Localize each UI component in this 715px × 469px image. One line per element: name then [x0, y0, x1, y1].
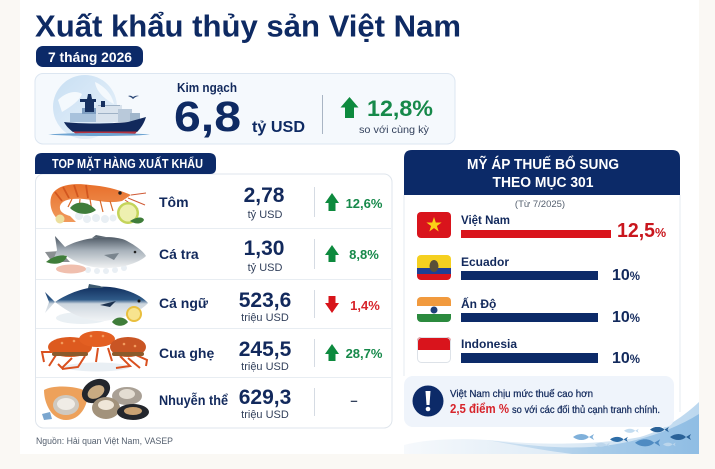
unit: tỷ USD: [248, 262, 282, 274]
value: 10%: [612, 350, 640, 367]
value: 2,78: [244, 184, 285, 207]
heading: top products: [35, 153, 216, 174]
value: 10%: [612, 309, 640, 326]
change: no data dash: –: [350, 393, 358, 408]
change: 8,8%: [349, 247, 379, 262]
value: 10%: [612, 267, 640, 284]
flag: Vietnam: [417, 212, 451, 238]
unit: tỷ USD: [252, 119, 305, 136]
icon: pangasius fish: [45, 235, 146, 274]
row: Nhuyễn thể: [42, 374, 358, 421]
country label: Indonesia: [461, 337, 517, 351]
value: 12,5: [617, 219, 655, 242]
row: Cá tra: [45, 235, 379, 274]
flag: Ecuador: [417, 255, 451, 280]
unit: triệu USD: [241, 409, 289, 421]
source note: Nguồn: Hải quan Việt Nam, VASEP: [36, 436, 173, 447]
value: 245,5: [239, 338, 292, 361]
icon: container ship with globe: [48, 75, 150, 139]
flag: India: [417, 297, 451, 322]
unit: triệu USD: [241, 312, 289, 324]
heading: top products: TOP MẶT HÀNG XUẤT KHẨU: [52, 156, 203, 171]
product name: Nhuyễn thể: [159, 392, 228, 408]
label: Kim ngạch: Kim ngạch: [177, 81, 237, 95]
icon: up arrow: [325, 344, 339, 361]
value: 6,8: 6,8: [174, 93, 241, 141]
period badge: [36, 46, 143, 67]
callout text: so với các đối thủ cạnh tranh chính.: [512, 404, 660, 416]
percent sign: %: [655, 226, 666, 240]
title: Xuất khẩu thủy sản Việt Nam: [35, 8, 461, 44]
callout text: 2,5 điểm %: [450, 401, 509, 416]
icon: tuna: [45, 284, 148, 326]
period badge: 7 tháng 2026: [48, 49, 132, 65]
icon: down arrow: [325, 296, 339, 313]
country label: Ecuador: [461, 255, 509, 269]
row: Ecuador: [417, 255, 640, 280]
icon: exclamation mark: [412, 386, 444, 416]
change: 12,6%: [346, 196, 383, 211]
panel heading: MỸ ÁP THUẾ BỔ SUNG: [467, 155, 619, 173]
callout: [404, 376, 674, 427]
product name: Cá ngữ: [159, 295, 209, 311]
date note: (Từ 7/2025): [515, 199, 565, 210]
panel: export turnover summary: [35, 74, 455, 144]
change: 28,7%: [346, 346, 383, 361]
row: Tôm: [50, 184, 383, 224]
row: Cá ngữ: [45, 284, 380, 326]
icon: up arrow: [340, 97, 358, 118]
value: 629,3: [239, 386, 291, 409]
icon: shellfish: [42, 374, 149, 420]
bar: [461, 230, 611, 238]
product name: Cá tra: [159, 246, 199, 262]
panel: top export products: [35, 153, 392, 428]
country label: Ấn Độ: [461, 296, 496, 311]
bar: [461, 271, 598, 280]
change caption: so với cùng kỳ: [359, 124, 430, 136]
decorative wave with fish: [404, 402, 699, 454]
change value: 12,8%: [367, 96, 433, 121]
panel heading: [404, 150, 680, 195]
icon: shrimp: [50, 184, 146, 224]
panel: US additional tariffs: [404, 150, 680, 427]
bar: [461, 353, 598, 363]
flag: Indonesia: [417, 337, 451, 363]
icon: up arrow: [325, 245, 339, 262]
panel heading: THEO MỤC 301: [492, 175, 594, 191]
callout text: Việt Nam chịu mức thuế cao hơn: [450, 388, 593, 400]
change: 1,4%: [350, 298, 380, 313]
row: Cua ghẹ: [42, 331, 383, 373]
product name: Cua ghẹ: [159, 345, 214, 361]
unit: triệu USD: [241, 361, 289, 373]
callout text: [450, 388, 660, 416]
unit: tỷ USD: [248, 209, 282, 221]
icon: crabs: [42, 331, 147, 372]
bar: [461, 313, 598, 322]
value: 523,6: [239, 289, 291, 312]
row: Việt Nam: [417, 212, 666, 242]
row: Indonesia: [417, 337, 640, 363]
value: 1,30: [244, 237, 284, 260]
country label: Việt Nam: [461, 213, 510, 227]
icon: up arrow: [325, 193, 339, 211]
row: Ấn Độ: [417, 297, 640, 322]
product name: Tôm: [159, 194, 189, 210]
